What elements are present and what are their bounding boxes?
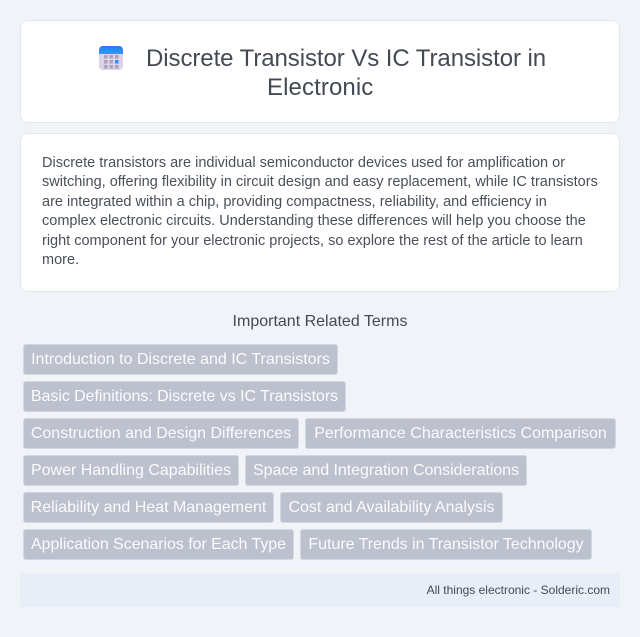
footer xyxy=(20,573,620,607)
tag: Introduction to Discrete and IC Transistors xyxy=(31,351,330,368)
heading: title: Electronic xyxy=(267,74,373,101)
tag xyxy=(23,381,346,412)
tag xyxy=(23,344,338,375)
text block: summary: switching, offering flexibility in circuit design and easy replacement, while IC transistors xyxy=(42,174,598,190)
icon: calendar xyxy=(99,46,123,70)
text block: summary: are integrated within a chip, providing compactness, reliability, and efficiency in xyxy=(42,194,547,210)
tag: Construction and Design Differences xyxy=(31,425,291,442)
text block: summary: Discrete transistors are individual semiconductor devices used for amplification or xyxy=(42,154,565,170)
text block: summary xyxy=(42,154,598,268)
tag: Future Trends in Transistor Technology xyxy=(308,536,584,553)
tag: Power Handling Capabilities xyxy=(31,462,231,479)
footer: All things electronic - Solderic.com xyxy=(427,583,610,597)
heading: title xyxy=(146,45,546,101)
tag: Space and Integration Considerations xyxy=(253,462,519,479)
tag xyxy=(305,418,616,449)
tag xyxy=(23,492,274,523)
tag: Performance Characteristics Comparison xyxy=(314,425,607,442)
tag xyxy=(23,455,239,486)
tag xyxy=(245,455,527,486)
tag xyxy=(280,492,503,523)
panel: title card xyxy=(20,20,620,123)
tag: Application Scenarios for Each Type xyxy=(31,536,286,553)
tag: Cost and Availability Analysis xyxy=(288,499,495,516)
tag list xyxy=(23,344,616,560)
tag xyxy=(23,529,294,560)
text block: summary: right component for your electronic projects, so explore the rest of the article to learn xyxy=(42,232,583,248)
text block: summary: complex electronic circuits. Understanding these differences will help you choose the xyxy=(42,213,586,229)
tag xyxy=(300,529,592,560)
tag: Reliability and Heat Management xyxy=(31,499,266,516)
panel: summary card xyxy=(20,133,620,292)
tag: Basic Definitions: Discrete vs IC Transistors xyxy=(31,388,338,405)
heading: important related terms: Important Related Terms xyxy=(233,313,407,330)
heading: title: Discrete Transistor Vs IC Transistor in xyxy=(146,45,546,72)
text block: summary: more. xyxy=(42,252,79,268)
tag xyxy=(23,418,299,449)
